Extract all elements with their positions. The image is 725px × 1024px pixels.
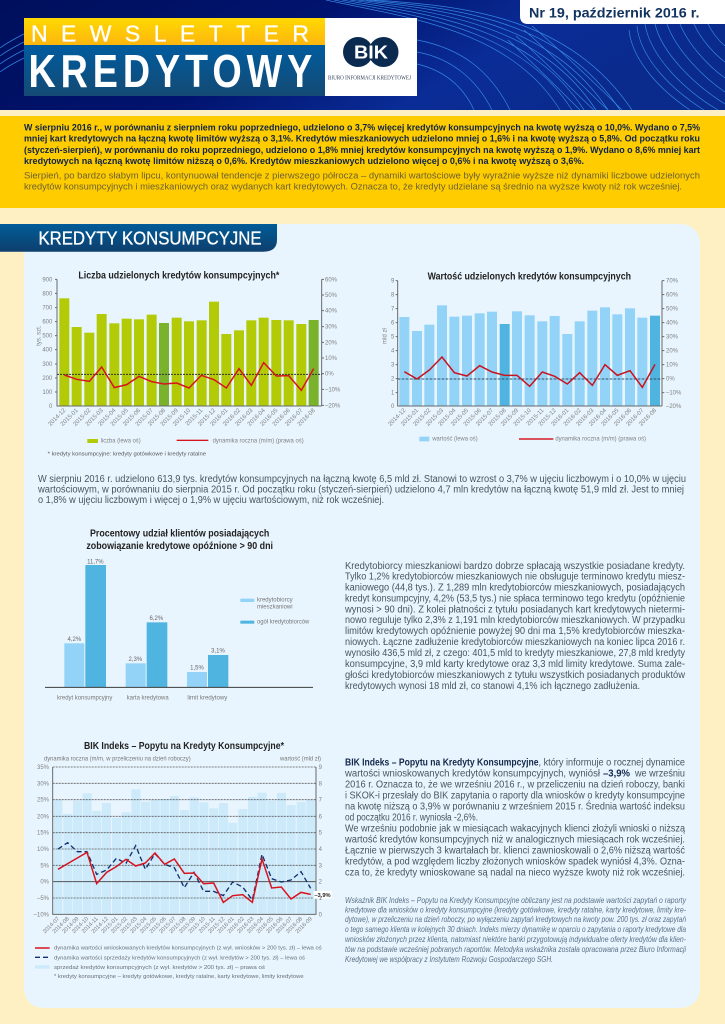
category labels: karta kredytowa	[127, 696, 169, 702]
month labels: 2014-10	[71, 916, 90, 935]
bars	[53, 789, 315, 914]
legend	[35, 946, 322, 980]
legend: dynamika wartości wnioskowanych kredytów konsumpcyjnych (z wył. wniosków > 200 tys. zł) – lewa oś	[54, 946, 322, 952]
legend: dynamika wartości sprzedaży kredytów konsumpcyjnych (z wył. kredytów > 200 tys. zł) – lewa oś	[54, 955, 305, 961]
left and right axis labels: 1	[391, 391, 395, 397]
text block: BIK indeks description: kredytów, a pod względem liczby złożonych wniosków spadek wyniósł 4,3%. Ozna-	[345, 857, 685, 868]
issue tab: Nr 19, październik 2016 r.	[529, 4, 700, 20]
month labels: 2016-08	[285, 916, 304, 935]
left and right axis labels	[382, 279, 682, 410]
month labels: 2016-07	[626, 407, 646, 428]
month labels: 2015-04	[98, 407, 118, 428]
month labels: 2015-03	[85, 407, 105, 428]
month labels: 2015-01	[100, 916, 119, 935]
month labels: 2016-01	[551, 407, 571, 428]
left and right axis labels: 3	[319, 863, 323, 869]
left and right axis labels: 20%	[666, 349, 679, 355]
issue tab	[520, 0, 725, 24]
left and right axis labels: tys. szt.	[36, 325, 42, 346]
left and right axis labels: 1	[319, 896, 323, 902]
legend: dynamika roczna (m/m) (prawa oś)	[555, 436, 646, 442]
summary box: kredytów konsumpcyjnych i mieszkaniowych oraz wydanych kart kredytowych. Oznacza to, że kredyty udzielane są średnio na wyższe kwoty niż rok wcześniej.	[24, 182, 682, 192]
month labels: 2016-05	[601, 407, 621, 428]
legend: * kredyty konsumpcyjne – kredyty gotówkowe, kredyty ratalne, karty kredytowe, limity kredytowe	[54, 974, 304, 980]
left and right axis labels: 0%	[666, 377, 675, 383]
left and right axis labels: 600	[42, 320, 53, 326]
legend	[419, 436, 646, 442]
month labels: 2016-02	[227, 916, 246, 935]
axis captions: dynamika roczna (m/m, w przeliczeniu na dzień roboczy)	[44, 757, 191, 763]
left and right axis labels: 5	[319, 831, 323, 837]
month labels: 2016-01	[210, 407, 230, 428]
left and right axis labels: 30%	[325, 325, 338, 331]
month labels	[42, 916, 314, 935]
left and right axis labels: 15%	[37, 831, 50, 837]
value labels: 1,5%	[190, 666, 204, 672]
line: sales dynamics	[58, 843, 311, 900]
month labels: 2016-06	[265, 916, 284, 935]
month labels: 2015-08	[147, 407, 168, 428]
month labels: 2015-04	[129, 916, 148, 935]
left and right axis labels: 20%	[37, 814, 50, 820]
logo: BIK: BIURO INFORMACJI KREDYTOWEJ	[328, 76, 412, 82]
month labels: 2016-04	[246, 916, 265, 935]
month labels: 2016-03	[235, 407, 255, 428]
left and right axis labels: 10%	[666, 363, 679, 369]
month labels: 2015-07	[135, 407, 155, 428]
left and right axis labels: 500	[42, 334, 53, 340]
text block: methodology note: Kredytowej we współpracy z Instytutem Rozwoju Gospodarczego SGH.	[345, 954, 553, 964]
value labels: 6,2%	[150, 616, 164, 622]
month labels: 2014-09	[61, 916, 80, 935]
text block: BIK indeks description: i SKOK-i przesłały do BIK zapytania o raporty dla wniosków o kredyty konsumpcyjne	[345, 791, 685, 802]
left and right axis labels: 8	[319, 781, 323, 787]
title: newsletter kredytowy: KREDYTOWY	[28, 45, 312, 97]
chart title: Procentowy udział klientów posiadających	[90, 529, 269, 540]
month labels: 2015-09	[178, 916, 197, 935]
month labels: 2015-01	[60, 407, 80, 428]
dynamics line	[404, 357, 655, 387]
text block: BIK indeks description: wartość kredytów konsumpcyjnych niż w analogicznych miesiącach rok wcześniej.	[344, 834, 685, 845]
month labels: 2015-06	[463, 407, 483, 428]
text block: methodology note	[345, 895, 687, 964]
left and right axis labels: 30%	[37, 781, 50, 787]
value labels: 4,2%	[68, 637, 82, 643]
month labels: 2014-07	[42, 916, 61, 935]
summary box: (styczeń-sierpień), w porównaniu do roku poprzedniego, udzielono o 1,8% mniej kredytów konsumpcyjnych na kwotę wyższą o 1,9%. Wydano o 8,6% mniej kart	[24, 145, 700, 155]
legend: dynamika roczna (m/m) (prawa oś)	[213, 439, 304, 445]
month labels: 2015-12	[538, 407, 558, 428]
text block: kredytobiorcy mieszkaniowi: głości kredytobiorców mieszkaniowych z tytułu wszystkich posiadanych produktów	[345, 670, 686, 681]
footnote: * kredyty konsumpcyjne: kredyty gotówkowe i kredyty ratalne	[48, 451, 206, 457]
text block: BIK indeks description: wartości wnioskowanych kredytów konsumpcyjnych, wyniósł	[344, 769, 601, 780]
month labels: 2015-04	[438, 407, 458, 428]
text block: kredytobiorcy mieszkaniowi: kredytowych wynosi 18 mld zł, co stanowi 4,1% ich łącznego zadłużenia.	[345, 681, 640, 692]
month labels: 2016-03	[576, 407, 596, 428]
left and right axis labels: –20%	[325, 403, 341, 409]
left and right axis labels: 4	[391, 349, 395, 355]
header banner	[0, 0, 725, 110]
month labels: 2016-07	[285, 407, 305, 428]
chart title: BIK Indeks – Popytu na Kredyty Konsumpcyjne*	[84, 741, 284, 752]
text block: BIK indeks description: we wrześniu	[634, 769, 685, 780]
bars	[399, 305, 660, 406]
panel: kredyty konsumpcyjne	[24, 224, 700, 1008]
month labels: 2016-09	[295, 916, 314, 935]
category labels: limit kredytowy	[187, 696, 227, 702]
month labels: 2015-11	[526, 407, 546, 427]
chart: procentowy udzial klientow	[45, 529, 313, 702]
left and right axis labels: 0	[319, 912, 323, 918]
legend: sprzedaż kredytów konsumpcyjnych (z wył. kredytów > 200 tys. zł) – prawa oś	[54, 965, 265, 971]
left and right axis labels: –20%	[666, 404, 682, 410]
text block: kredytobiorcy mieszkaniowi: kredyt konsumpcyjny, 4,2% (53,5 tys.) nie spłaca terminowo tego kredytu (opóźnienie	[345, 593, 685, 604]
month labels: 2015-09	[160, 407, 180, 428]
text block: sierpien summary: wartościowym, w porównaniu do sierpnia 2015 r. Od początku roku (styczeń-sierpień) udzielono 4,7 mln kredytów na łączną kwotę 51,9 mld zł. Jest to mniej	[37, 485, 684, 496]
month labels: 2015-02	[110, 916, 129, 935]
left and right axis labels: 6	[391, 321, 395, 327]
left and right axis labels: 10%	[325, 356, 338, 362]
value labels: 3,1%	[211, 649, 225, 655]
month labels: 2014-12	[91, 916, 110, 935]
left and right axis labels: 6	[319, 814, 323, 820]
month labels: 2016-04	[588, 407, 609, 428]
left and right axis labels: 800	[42, 291, 53, 297]
left and right axis labels: –10%	[666, 391, 682, 397]
left and right axis labels: 8	[391, 293, 395, 299]
category labels: kredyt konsumpcyjny	[57, 696, 112, 702]
month labels: 2015-12	[197, 407, 218, 428]
chart title: Wartość udzielonych kredytów konsumpcyjnych	[428, 272, 631, 283]
axes	[396, 281, 664, 406]
left and right axis labels: –10%	[34, 912, 50, 918]
dynamics line	[64, 363, 314, 390]
month labels	[388, 407, 659, 428]
month labels	[48, 407, 317, 428]
chart title	[86, 529, 273, 552]
month labels: 2014-08	[52, 916, 71, 935]
month labels: 2015-10	[188, 916, 207, 935]
month labels: 2015-07	[158, 916, 177, 935]
month labels: 2014-12	[48, 407, 68, 428]
left and right axis labels: 0	[391, 404, 395, 410]
legend: liczba (lewa oś)	[101, 439, 141, 445]
left and right axis labels: 60%	[666, 293, 679, 299]
value labels	[68, 559, 225, 672]
value labels: 11,7%	[87, 559, 104, 565]
text block: BIK indeks description: , który informuje o rocznej dynamice	[538, 758, 685, 769]
month labels: 2015-11	[198, 916, 217, 935]
legend: ogół kredytobiorców	[257, 620, 310, 626]
month labels: 2014-12	[388, 407, 408, 428]
month labels: 2016-08	[297, 407, 317, 428]
month labels: 2015-03	[425, 407, 446, 428]
category labels	[57, 696, 227, 702]
left and right axis labels: 4	[319, 847, 323, 853]
month labels: 2016-05	[256, 916, 275, 935]
axes	[55, 279, 324, 406]
chart title: zobowiązanie kredytowe opóźnione > 90 dni	[86, 541, 273, 552]
title: newsletter kredytowy: NEWSLETTER	[31, 20, 309, 46]
month labels: 2015-05	[139, 916, 158, 935]
left and right axis labels: 9	[391, 279, 395, 285]
month labels: 2015-05	[450, 407, 471, 428]
month labels: 2016-08	[638, 407, 659, 428]
text block: kredytobiorcy mieszkaniowi: Kredytobiorcy mieszkaniowi bardzo dobrze spłacają wszystkie posiadane kredyty.	[345, 561, 685, 572]
left and right axis labels: 40%	[666, 321, 679, 327]
left and right axis labels: 700	[42, 306, 53, 312]
summary box: mniej kart kredytowych na łączną kwotę limitów wyższą o 3,1%. Kredytów mieszkaniowych udzielono mniej o 1,6% i na kwotę wyższą o 5,8%. Od początku roku	[24, 134, 700, 144]
section heading	[0, 224, 277, 252]
month labels: 2015-08	[488, 407, 508, 428]
month labels: 2016-06	[613, 407, 634, 428]
left and right axis labels: 9	[319, 765, 323, 771]
axis captions	[44, 757, 321, 763]
legend: mieszkaniowi	[257, 605, 293, 611]
summary box	[0, 116, 725, 208]
text block: kredytobiorcy mieszkaniowi: kaniowego (44,8 tys.). Z 1,289 mln kredytobiorców mieszkaniowych, posiadających	[345, 583, 685, 594]
text block: BIK indeks description: na kwotę niższą o 3,9% w porównaniu z wrześniem 2015 r. Średnia wartość indeksu	[345, 800, 685, 813]
text block: kredytobiorcy mieszkaniowi: wynosiło 436,5 mld zł, z czego: 401,5 mld to kredyty mieszkaniowe, 27,8 mld kredyty	[344, 648, 685, 659]
text block: BIK indeks description: –3,9%	[603, 769, 630, 780]
left and right axis labels: 300	[42, 362, 53, 368]
month labels: 2015-08	[168, 916, 187, 935]
month labels: 2015-06	[122, 407, 143, 428]
text block: BIK indeks description: BIK Indeks – Popytu na Kredyty Konsumpcyjne	[345, 758, 539, 769]
month labels: 2016-02	[563, 407, 583, 428]
chart: BIK indeks	[34, 741, 332, 980]
axis captions: wartość (mld zł)	[279, 757, 321, 763]
month labels: 2015-01	[400, 407, 421, 428]
month labels: 2015-09	[500, 407, 521, 428]
left and right axis labels: 35%	[37, 765, 50, 771]
left and right axis labels: 40%	[325, 309, 338, 315]
left and right axis labels: 5%	[40, 863, 50, 869]
grid and axes	[53, 767, 316, 914]
text block: kredytobiorcy mieszkaniowi	[344, 561, 686, 692]
left and right axis labels: 20%	[325, 340, 338, 346]
left and right axis labels: –10%	[325, 387, 341, 393]
month labels: 2016-04	[247, 407, 267, 428]
text block: BIK indeks description: We wrześniu podobnie jak w miesiącach wakacyjnych klienci złożyli wnioski o niższą	[345, 823, 685, 834]
left and right axis labels: 50%	[325, 293, 338, 299]
left and right axis labels	[34, 765, 323, 918]
left and right axis labels: 0%	[40, 880, 50, 886]
legend	[87, 439, 304, 445]
bars	[59, 298, 319, 406]
left and right axis labels: 400	[42, 348, 53, 354]
text block: kredytobiorcy mieszkaniowi: nowo reguluje tylko 2,3% z 1,191 mln kredytobiorców mieszkaniowych. W przypadku	[345, 615, 685, 626]
text block: BIK indeks description: od początku 2016 r. wyniosła -2,6%.	[345, 813, 478, 824]
text block: sierpien summary: o 1,8% w ujęciu liczbowym i więcej o 1,9% w ujęciu wartościowym, niż rok wcześniej.	[38, 495, 384, 506]
left and right axis labels: 2	[319, 880, 323, 886]
left and right axis labels: 0%	[325, 372, 334, 378]
text block: kredytobiorcy mieszkaniowi: niowych. Łączne zadłużenie kredytobiorców mieszkaniowych na koniec lipca 2016 r.	[345, 637, 685, 648]
legend	[240, 597, 310, 626]
month labels: 2015-10	[172, 407, 193, 428]
left and right axis labels: 2	[391, 377, 395, 383]
callout: minus 3,9%: –3,9%	[314, 893, 331, 899]
left and right axis labels: 7	[391, 307, 395, 313]
legend: kredytobiorcy	[257, 597, 293, 603]
left and right axis labels: 5	[391, 335, 395, 341]
left and right axis labels: 200	[42, 376, 53, 382]
left and right axis labels: 70%	[666, 279, 679, 285]
left and right axis labels: 10%	[37, 847, 50, 853]
left and right axis labels: 0	[49, 404, 53, 410]
left and right axis labels: 25%	[37, 798, 50, 804]
left and right axis labels: –5%	[37, 896, 50, 902]
month labels: 2016-02	[222, 407, 243, 428]
section heading: KREDYTY KONSUMPCYJNE	[38, 228, 262, 248]
line: application dynamics	[58, 852, 311, 902]
chart: wartosc udzielonych kredytow	[382, 272, 682, 442]
title: newsletter kredytowy	[24, 18, 325, 97]
month labels: 2016-05	[260, 407, 280, 428]
summary box: W sierpniu 2016 r., w porównaniu z sierpniem roku poprzedniego, udzielono o 3,7% więcej kredytów konsumpcyjnych na kwotę wyższą o 10,0%. Wydano o 7,5%	[24, 122, 700, 132]
logo: BIK	[325, 18, 417, 96]
left and right axis labels: 100	[42, 390, 53, 396]
month labels: 2015-07	[475, 407, 496, 428]
left and right axis labels	[36, 277, 341, 410]
month labels: 2015-10	[513, 407, 533, 428]
month labels: 2015-03	[120, 916, 139, 935]
month labels: 2015-12	[207, 916, 226, 935]
text block: BIK indeks description: 2016 r. Oznacza to, że we wrześniu 2016 r., w przeliczeniu na dzień roboczy, banki	[345, 780, 685, 791]
month labels: 2016-03	[236, 916, 255, 935]
logo: BIK: BIK	[354, 42, 388, 62]
text block: kredytobiorcy mieszkaniowi: konsumpcyjne, 3,9 mld karty kredytowe oraz 3,3 mld limity kredytowe. Suma zale-	[345, 659, 685, 670]
month labels: 2016-06	[272, 407, 292, 428]
left and right axis labels: mld zł	[382, 328, 388, 344]
text block: BIK indeks description: Łącznie w pierwszych 3 kwartałach br. klienci zawnioskowali o 2,6% niższą wartość	[345, 846, 685, 857]
value labels: 2,3%	[129, 657, 143, 663]
month labels: 2014-11	[81, 916, 100, 935]
legend: wartość (lewa oś)	[431, 436, 478, 442]
month labels: 2016-07	[275, 916, 294, 935]
text block: BIK indeks description: cza to, że kredyty wnioskowane są nadal na nieco wyższe kwoty niż rok wcześniej.	[345, 868, 685, 878]
month labels: 2015-05	[110, 407, 130, 428]
chart title: Liczba udzielonych kredytów konsumpcyjnych*	[78, 270, 280, 281]
month labels: 2015-11	[185, 407, 205, 427]
summary box: Sierpień, po bardzo słabym lipcu, kontynuował tendencje z pierwszego półrocza – dynamiki wartościowe były wyraźnie wyższe niż dynamiki liczbowe udzielonych	[24, 170, 700, 180]
left and right axis labels: 3	[391, 363, 395, 369]
text block: BIK indeks description	[344, 758, 685, 878]
text block: kredytobiorcy mieszkaniowi: limitów kredytowych opóźnienie powyżej 90 dni ma 1,5% kredytobiorców mieszka-	[345, 626, 685, 637]
left and right axis labels: 7	[319, 798, 323, 804]
month labels: 2015-02	[73, 407, 93, 428]
callout: minus 3,9%	[314, 891, 332, 899]
text block: kredytobiorcy mieszkaniowi: wynosi > 90 dni). Z kolei płatności z tytułu posiadanych kart kredytowych nietermi-	[344, 604, 685, 615]
month labels: 2015-06	[149, 916, 168, 935]
text block: kredytobiorcy mieszkaniowi: Tylko 1,2% kredytobiorców mieszkaniowych nie obsługuje terminowo kredytu miesz-	[345, 572, 685, 583]
baseline	[45, 686, 313, 689]
chart: liczba udzielonych kredytow	[36, 270, 341, 457]
left and right axis labels: 60%	[325, 277, 338, 283]
month labels: 2015-02	[413, 407, 433, 428]
left and right axis labels: 900	[42, 277, 53, 283]
bars	[64, 565, 228, 687]
text block: sierpien summary	[37, 474, 686, 506]
summary box: kredytowych na łączną kwotę limitów niższą o 0,6%. Kredytów mieszkaniowych udzielono więcej o 0,6% i na kwotę wyższą o 3,6%.	[24, 156, 584, 166]
text block: sierpien summary: W sierpniu 2016 r. udzielono 613,9 tys. kredytów konsumpcyjnych na łączną kwotę 6,5 mld zł. Stanowi to wzrost o 3,7% w ujęciu liczbowym i o 10,0% w ujęciu	[38, 474, 686, 485]
left and right axis labels: 50%	[666, 307, 679, 313]
left and right axis labels: 30%	[666, 335, 679, 341]
month labels: 2016-01	[217, 916, 236, 935]
